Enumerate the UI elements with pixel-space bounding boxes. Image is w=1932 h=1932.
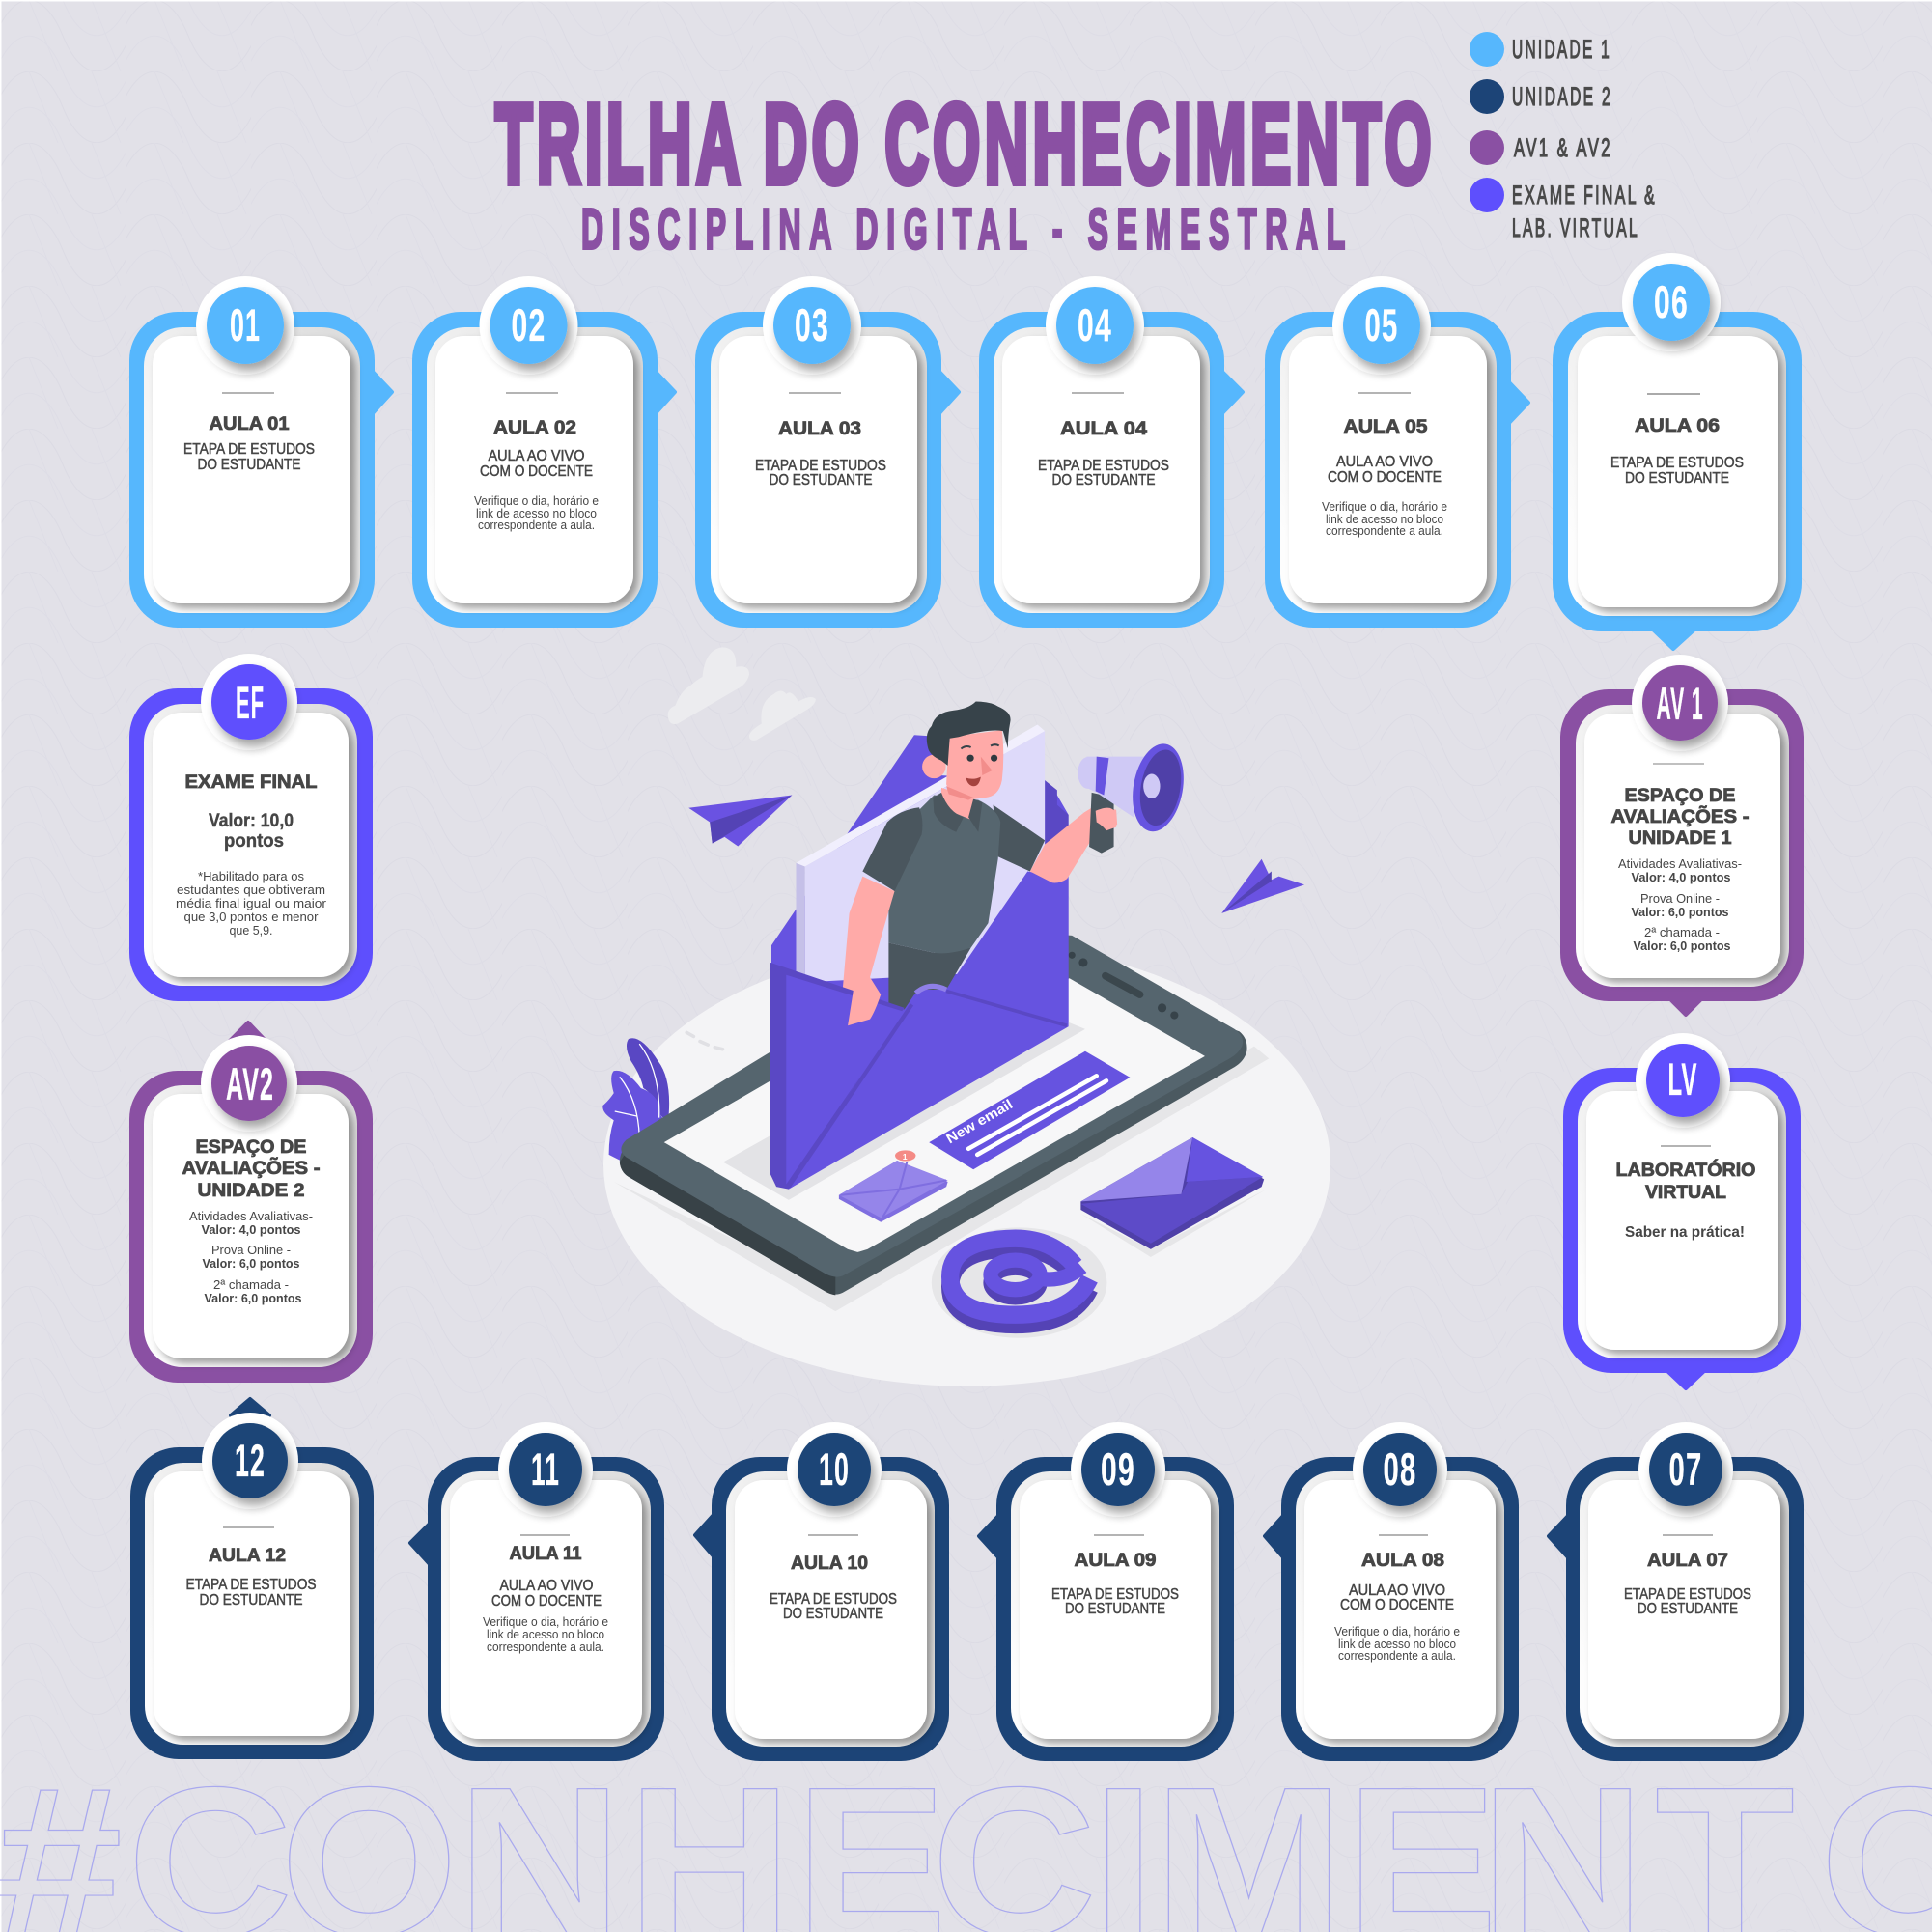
- number badge: 02: [512, 299, 546, 350]
- card text: [1334, 1550, 1460, 1663]
- number badge: [1046, 276, 1144, 375]
- letter paper: [796, 725, 1045, 982]
- card text: [755, 418, 886, 489]
- icon: small mail with notification: [839, 1150, 948, 1222]
- number badge: 07: [1668, 1443, 1703, 1495]
- card text: DO ESTUDANTE: [199, 1592, 303, 1609]
- card text: 2ª chamada -: [1644, 926, 1720, 939]
- number badge: 09: [1101, 1443, 1135, 1495]
- card text: [1610, 415, 1744, 487]
- card text: DO ESTUDANTE: [769, 472, 873, 489]
- card text: [770, 1553, 897, 1622]
- card: AULA 08: [1265, 1422, 1519, 1761]
- card: AULA 05: [1265, 276, 1528, 628]
- legend: [1470, 32, 1657, 242]
- card: AV1: [1560, 655, 1804, 1015]
- icon: plant: [602, 1038, 669, 1162]
- badge LV: [1636, 1033, 1730, 1128]
- card text: estudantes que obtiveram: [177, 883, 325, 897]
- card: AULA 03: [695, 276, 959, 628]
- card text: Prova Online -: [1640, 892, 1720, 906]
- card frame with arrow: [979, 1457, 1234, 1761]
- illustration: person with megaphone in envelope on tablet: [602, 647, 1330, 1386]
- card text: Saber na prática!: [1625, 1224, 1745, 1241]
- card text: correspondente a aula.: [1338, 1649, 1456, 1663]
- card text: Prova Online -: [211, 1244, 291, 1257]
- icon: large envelope: [1080, 1137, 1267, 1257]
- card text: ETAPA DE ESTUDOS: [1051, 1586, 1179, 1603]
- card text: Verifique o dia, horário e: [1334, 1625, 1460, 1638]
- card text: Valor: 10,0: [209, 810, 294, 831]
- card text: 2ª chamada -: [213, 1278, 289, 1292]
- card text: AULA AO VIVO: [500, 1578, 593, 1594]
- card text: AULA 03: [778, 418, 861, 439]
- icon: dashes: [686, 1032, 722, 1050]
- card text: Verifique o dia, horário e: [474, 494, 599, 508]
- number badge: [196, 276, 294, 375]
- legend item: Unidade 2: [1470, 79, 1612, 114]
- card text: [1624, 1550, 1751, 1617]
- card text: média final igual ou maior: [176, 897, 326, 910]
- icon: at sign: [932, 1227, 1106, 1338]
- card text: UNIDADE 1: [1628, 827, 1732, 849]
- card: EXAME FINAL: [129, 654, 373, 1001]
- number badge: 03: [795, 299, 829, 350]
- card text: ESPAÇO DE: [195, 1136, 307, 1158]
- card text: correspondente a aula.: [487, 1640, 604, 1654]
- card text: ESPAÇO DE: [1624, 785, 1736, 806]
- card text: link de acesso no bloco: [476, 507, 597, 520]
- card text: AULA AO VIVO: [1336, 454, 1433, 470]
- card text: ETAPA DE ESTUDOS: [1610, 455, 1744, 471]
- card frame: [129, 1071, 373, 1383]
- number badge: 12: [235, 1435, 266, 1486]
- card: AULA 12: [130, 1399, 374, 1759]
- card frame with arrow: [129, 312, 392, 628]
- card text: link de acesso no bloco: [1338, 1638, 1456, 1651]
- card text: [1610, 785, 1750, 953]
- legend item: Unidade 1: [1470, 32, 1611, 67]
- legend item: Exame final e lab virtual: EXAME FINAL &: [1512, 181, 1657, 210]
- card text: AULA 04: [1060, 418, 1147, 439]
- card text: ETAPA DE ESTUDOS: [1038, 458, 1169, 474]
- card text: COM O DOCENTE: [480, 463, 593, 480]
- card: AULA 11: [410, 1422, 664, 1761]
- number badge: [479, 276, 577, 375]
- card text: [183, 413, 315, 473]
- card text: ETAPA DE ESTUDOS: [183, 441, 315, 458]
- card text: AULA AO VIVO: [1349, 1582, 1445, 1599]
- card frame with arrow: [695, 312, 959, 628]
- card text: Atividades Avaliativas-: [1618, 857, 1742, 871]
- floor ellipse: [603, 943, 1330, 1386]
- card text: [1322, 416, 1447, 538]
- card frame with arrow: [1553, 312, 1802, 649]
- card text: DO ESTUDANTE: [783, 1606, 883, 1622]
- card text: ETAPA DE ESTUDOS: [1624, 1586, 1751, 1603]
- badge EF: [201, 654, 297, 750]
- card text: COM O DOCENTE: [1328, 469, 1442, 486]
- number badge: 06: [1654, 276, 1689, 327]
- card frame with arrow: [1549, 1457, 1804, 1761]
- card text: DO ESTUDANTE: [1052, 472, 1155, 489]
- legend item: Exame final e lab virtual: [1470, 178, 1657, 242]
- icon: paper plane right: [1221, 859, 1304, 913]
- card frame with arrow: [1560, 689, 1804, 1015]
- card frame with arrow: [410, 1457, 664, 1761]
- card text: AULA 06: [1635, 415, 1720, 436]
- tablet: [614, 928, 1269, 1311]
- number badge: [498, 1422, 593, 1517]
- number badge: [1071, 1422, 1165, 1517]
- card text: AULA 09: [1074, 1550, 1157, 1571]
- card text: AULA AO VIVO: [489, 448, 585, 464]
- panel: new email notice: [929, 1051, 1130, 1169]
- card text: AULA 07: [1647, 1550, 1728, 1571]
- legend item: AV1 e AV2: [1470, 130, 1612, 165]
- card frame with arrow: [979, 312, 1243, 628]
- number badge: [1622, 253, 1721, 351]
- legend item: Unidade 2: UNIDADE 2: [1512, 82, 1612, 111]
- number badge: 08: [1383, 1443, 1417, 1495]
- card text: [182, 1136, 321, 1305]
- card text: COM O DOCENTE: [491, 1593, 602, 1610]
- card text: pontos: [224, 830, 284, 852]
- card text: [474, 417, 599, 532]
- card text: AULA 08: [1361, 1550, 1444, 1571]
- card frame with arrow: [412, 312, 675, 628]
- number badge: [1353, 1422, 1447, 1517]
- card text: correspondente a aula.: [478, 518, 595, 532]
- number badge: 05: [1365, 299, 1398, 350]
- card text: que 5,9.: [230, 924, 272, 938]
- badge AV2: [201, 1035, 297, 1132]
- card text: Verifique o dia, horário e: [1322, 500, 1447, 514]
- card text: DO ESTUDANTE: [197, 457, 301, 473]
- card: AULA 06: [1553, 253, 1802, 649]
- number badge: 01: [230, 299, 261, 350]
- card text: correspondente a aula.: [1326, 524, 1443, 538]
- card text: [1616, 1158, 1755, 1241]
- card frame: [130, 1447, 374, 1759]
- card: AULA 02: [412, 276, 675, 628]
- card text: AULA 10: [791, 1553, 868, 1574]
- card text: Valor: 6,0 pontos: [1634, 939, 1731, 953]
- left hand over envelope: [848, 977, 881, 1025]
- number badge: 04: [1078, 299, 1112, 350]
- card text: [483, 1543, 608, 1654]
- icon: clouds: [668, 647, 816, 741]
- card: AV2: [129, 1022, 373, 1383]
- card text: [1038, 418, 1169, 489]
- envelope back: [771, 735, 1069, 1190]
- badge AV2: AV2: [226, 1058, 274, 1109]
- badge LV: LV: [1668, 1053, 1697, 1105]
- card: LABORATÓRIO VIRTUAL: [1563, 1033, 1801, 1388]
- card text: UNIDADE 2: [197, 1180, 305, 1201]
- card text: [176, 771, 326, 938]
- number badge: [763, 276, 861, 375]
- legend item: Unidade 1: UNIDADE 1: [1512, 35, 1611, 64]
- icon: small mail with notification: 1: [903, 1152, 908, 1162]
- card text: LABORATÓRIO: [1616, 1158, 1755, 1181]
- card text: link de acesso no bloco: [487, 1628, 604, 1641]
- card text: Valor: 6,0 pontos: [1632, 906, 1729, 919]
- arrow up: [231, 1399, 269, 1415]
- card frame with arrow: [1563, 1068, 1801, 1388]
- badge AV1: AV 1: [1657, 678, 1703, 729]
- card text: AULA 02: [493, 417, 576, 438]
- card text: ETAPA DE ESTUDOS: [185, 1577, 317, 1593]
- card text: Valor: 4,0 pontos: [1632, 871, 1731, 884]
- card text: Verifique o dia, horário e: [483, 1615, 608, 1629]
- arrow up: [228, 1022, 267, 1043]
- card text: Valor: 4,0 pontos: [201, 1223, 301, 1237]
- number badge: [1332, 276, 1431, 375]
- card frame with arrow: [1265, 1457, 1519, 1761]
- card text: ETAPA DE ESTUDOS: [770, 1591, 897, 1608]
- badge AV1: [1632, 655, 1728, 751]
- badge EF: EF: [236, 677, 265, 728]
- card text: AULA 01: [209, 413, 290, 434]
- number badge: [787, 1422, 882, 1517]
- card text: AVALIAÇÕES -: [1610, 804, 1750, 827]
- card: AULA 04: [979, 276, 1243, 628]
- card: AULA 01: [129, 276, 392, 628]
- icon: paper plane left: [688, 795, 792, 847]
- card text: AULA 05: [1344, 416, 1428, 437]
- card text: que 3,0 pontos e menor: [183, 910, 319, 924]
- card text: link de acesso no bloco: [1326, 513, 1443, 526]
- card text: Valor: 6,0 pontos: [205, 1292, 302, 1305]
- card text: Atividades Avaliativas-: [189, 1210, 313, 1223]
- icon: megaphone: [1078, 740, 1190, 854]
- number badge: 11: [531, 1443, 560, 1495]
- card text: [1051, 1550, 1179, 1617]
- person: [843, 702, 1045, 1025]
- card: AULA 07: [1549, 1422, 1804, 1761]
- card text: *Habilitado para os: [198, 870, 304, 883]
- card text: AVALIAÇÕES -: [182, 1156, 321, 1179]
- card text: DO ESTUDANTE: [1638, 1601, 1738, 1617]
- card frame with arrow: [695, 1457, 949, 1761]
- card: AULA 10: [695, 1422, 949, 1761]
- card: AULA 09: [979, 1422, 1234, 1761]
- legend item: Exame final e lab virtual: LAB. VIRTUAL: [1512, 213, 1639, 242]
- card text: AULA 12: [209, 1545, 286, 1566]
- card text: [185, 1545, 317, 1609]
- card text: ETAPA DE ESTUDOS: [755, 458, 886, 474]
- card text: VIRTUAL: [1645, 1182, 1726, 1203]
- person's right arm: [1030, 805, 1117, 882]
- card frame: [129, 688, 373, 1001]
- number badge: 10: [819, 1443, 850, 1495]
- card frame with arrow: [1265, 312, 1528, 628]
- legend item: AV1 e AV2: AV1 & AV2: [1514, 133, 1612, 162]
- envelope front: [770, 872, 1069, 1190]
- card text: AULA 11: [510, 1543, 582, 1564]
- card text: EXAME FINAL: [185, 771, 318, 793]
- card text: COM O DOCENTE: [1340, 1597, 1454, 1613]
- card text: DO ESTUDANTE: [1625, 470, 1729, 487]
- number badge: [1638, 1422, 1733, 1517]
- card text: Valor: 6,0 pontos: [203, 1257, 300, 1271]
- panel: new email notice: New email: [944, 1097, 1016, 1147]
- number badge: [202, 1413, 298, 1509]
- card text: DO ESTUDANTE: [1065, 1601, 1165, 1617]
